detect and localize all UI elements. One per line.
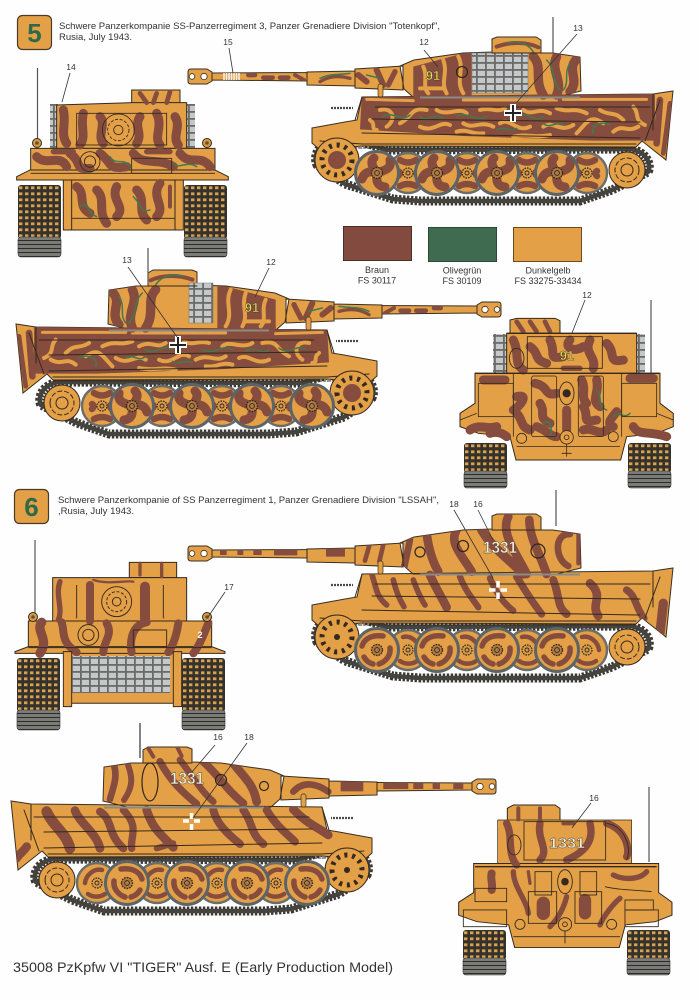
badge: scheme 6: 6 — [24, 492, 39, 522]
swatch: Dunkelgelb: FS 33275-33434 — [514, 276, 582, 286]
callout label 14: 14 — [66, 62, 76, 72]
callout label 12 rear: 12 — [582, 290, 592, 300]
antenna — [648, 787, 650, 862]
heading: scheme 6 description — [58, 495, 439, 516]
callout label 17 — [208, 582, 234, 617]
swatch: Olivegrün: FS 30109 — [442, 276, 482, 286]
antenna — [139, 723, 141, 758]
turret number 1331 rear: 1331 — [549, 835, 585, 852]
swatch: Braun: Braun — [365, 265, 389, 275]
tank 6: right side view facing right — [11, 723, 496, 911]
white national cross — [489, 581, 507, 599]
callout labels: tank 5 side: 15 — [223, 37, 233, 47]
heading: scheme 5 description: Rusia, July 1943. — [59, 32, 132, 42]
tank 6: left side view facing left — [188, 490, 673, 678]
antenna — [36, 68, 38, 142]
antenna — [552, 17, 554, 53]
callout labels: tank 5 side: 13 — [573, 23, 583, 33]
kill rings on barrel — [224, 73, 239, 80]
turret number 91 rear: 91 — [560, 348, 574, 363]
turret number 1331: 1331 — [170, 769, 204, 788]
headlights — [28, 612, 212, 622]
antenna — [555, 490, 557, 526]
tank 5: rear view — [460, 300, 673, 488]
callout labels: tank 6 side: 16 — [473, 499, 483, 509]
callout labels: tank 5 side: 12 — [419, 37, 429, 47]
footer title: 35008 PzKpfw VI "TIGER" Ausf. E (Early Production Model) — [13, 959, 393, 975]
turret port rings — [415, 540, 545, 558]
camouflage: tank 5 side — [248, 42, 670, 153]
heading: scheme 6 description: ,Rusia, July 1943. — [58, 506, 134, 516]
callout labels: tank 5 right side — [122, 255, 276, 337]
white tactical mark: 2 — [197, 630, 203, 640]
turret number 1331: 1331 — [483, 538, 517, 557]
callout labels: tank 6 right side: 16 — [213, 732, 223, 742]
callout label 16 rear: 16 — [589, 793, 599, 803]
antenna — [34, 540, 36, 615]
spare track links on glacis — [72, 656, 170, 693]
camouflage: tank 5 right side — [19, 275, 441, 386]
swatch: Dunkelgelb: Dunkelgelb — [525, 266, 571, 276]
swatch: Braun — [344, 226, 412, 286]
callout labels: tank 6 right side — [192, 732, 254, 818]
heading: scheme 6 description: Schwere Panzerkompanie of SS Panzerregiment 1, Panzer Grenadiere Division "LSSAH", — [58, 495, 439, 505]
badge: scheme 5: 5 — [27, 18, 42, 48]
colour swatches legend — [344, 226, 582, 286]
heading: scheme 5 description: Schwere Panzerkompanie SS-Panzerregiment 3, Panzer Grenadiere Division "Totenkopf", — [59, 21, 440, 31]
headlights — [32, 138, 212, 148]
callout labels: tank 6 side: 18 — [449, 499, 459, 509]
camouflage: tiger stripes side — [220, 517, 663, 633]
callout labels: tank 5 right side: 12 — [266, 257, 276, 267]
turret number 91: 91 — [426, 68, 440, 83]
white national cross — [183, 813, 200, 830]
antenna — [650, 300, 652, 373]
national cross — [504, 104, 522, 122]
tank 6: front view — [15, 540, 225, 730]
swatch: Braun: FS 30117 — [358, 276, 396, 286]
turret hatch and port rings — [142, 763, 268, 801]
callout labels: tank 5 right side: 13 — [122, 255, 132, 265]
heading: scheme 5 description — [59, 21, 440, 42]
callout labels: tank 6 right side: 18 — [244, 732, 254, 742]
tank 6: rear view — [459, 787, 672, 975]
callout label 17: 17 — [224, 582, 234, 592]
callout label 14 — [62, 62, 76, 102]
turret number 91: 91 — [245, 300, 259, 315]
swatch: Olivegrün — [428, 228, 496, 286]
spare track links on turret — [472, 53, 528, 93]
swatch: Olivegrün: Olivegrün — [443, 266, 481, 276]
tank 5: left side view facing left — [188, 17, 673, 201]
badge: scheme 5 — [18, 16, 52, 50]
tank 5: right side view facing right — [16, 248, 501, 434]
spare track links on turret — [189, 283, 213, 323]
spare tracks beside turret — [50, 104, 58, 148]
national cross — [169, 336, 187, 354]
camouflage: tiger stripes right side — [17, 746, 463, 858]
callout labels: tank 5 side — [223, 23, 583, 102]
callout label 16 rear — [572, 793, 599, 828]
tank 5: front view — [17, 68, 228, 257]
badge: scheme 6 — [14, 490, 48, 524]
antenna — [147, 248, 149, 285]
swatch: Dunkelgelb — [514, 228, 582, 286]
gun mantlet ring marking — [456, 66, 468, 78]
callout label 12 rear — [572, 290, 592, 333]
callout labels: tank 6 side — [449, 499, 493, 578]
